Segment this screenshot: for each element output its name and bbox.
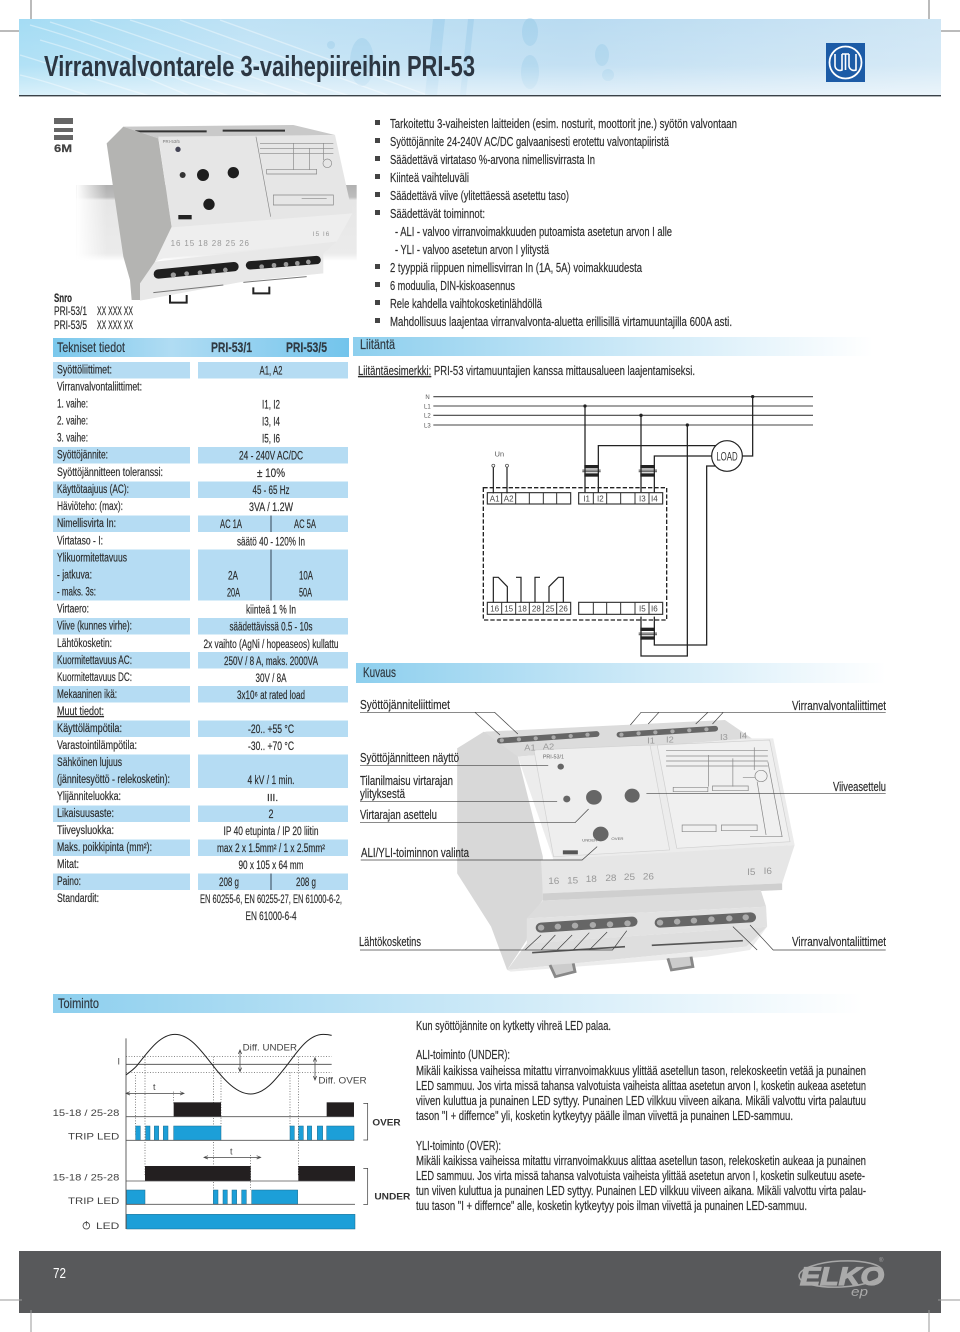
row: Virtaero: Virtaero:: [57, 604, 89, 616]
device illustration with callouts: 15: [567, 876, 578, 886]
feature bullet list: 6 moduulia, DIN-kiskoasennus: [390, 279, 515, 293]
feature bullet list: Rele kahdella vaihtokosketinlähdöllä: [390, 297, 542, 311]
icon: ELKO ep logo: [798, 1257, 885, 1299]
row: Virtataso: Virtataso - I:: [57, 536, 103, 548]
phase lines: L2: [424, 414, 431, 420]
row: 1. vaihe: [57, 398, 280, 412]
device illustration with callouts: I2: [666, 735, 674, 745]
row: Syöttöjännite: Syöttöjännite:: [57, 450, 108, 462]
wires: [585, 397, 753, 656]
row: Käyttötaajuus: 45 - 65 Hz: [252, 485, 290, 497]
feature bullet list: Tarkoitettu 3-vaiheisten laitteiden (esim. nosturit, moottorit jne.) syötön valvontaan: [390, 117, 737, 131]
heading: Liitäntä: [353, 336, 873, 356]
supply terminals Un: Un: [495, 450, 504, 459]
device illustration with callouts: A2: [543, 742, 554, 751]
device illustration with callouts: 16: [548, 876, 559, 887]
callout labels: Syöttöjänniteliittimet: [360, 698, 450, 712]
function description text: ALI-toiminto (UNDER):: [416, 1048, 510, 1062]
terminals top: I3: [639, 494, 646, 503]
row: Lähtökosketin: [57, 638, 338, 651]
row: Nimellisvirta: [53, 516, 348, 532]
row: 1. vaihe: I1, I2: [262, 400, 280, 412]
axis labels: Diff. UNDER: [243, 1043, 298, 1053]
table header: [53, 338, 349, 357]
row: Standardit: EN 61000-6-4: [246, 911, 297, 923]
device illustration with callouts: OVER: [611, 836, 624, 841]
row: Viive: Viive (kunnes virhe):: [57, 620, 132, 632]
phase lines: L3: [424, 423, 431, 429]
product photo: 16 15 18 28 25 26: [171, 239, 250, 248]
row: Varastointilämpötila: -30.. +70 °C: [248, 741, 294, 753]
feature bullet list: - ALI - valvoo virranvoimakkuuden putoamista asetetun arvon I alle: [395, 225, 672, 239]
row: Varastointilämpötila: Varastointilämpötila:: [57, 740, 137, 752]
header banner: [19, 18, 941, 96]
row: Paino: [53, 874, 348, 890]
page number: 72: [53, 1265, 66, 1282]
device illustration with callouts: 18: [586, 874, 597, 885]
row: Maks. poikkipinta: max 2 x 1.5mm² / 1 x 2.5mm²: [217, 843, 325, 855]
row: Kuormitettavuus AC: Kuormitettavuus AC:: [57, 655, 132, 667]
function description text: [416, 1019, 866, 1213]
row: Standardit: EN 60255-6, EN 60255-27, EN 61000-6-2,: [200, 894, 342, 906]
row: Sähköinen lujuus: (jännitesyöttö - relekosketin):: [57, 774, 170, 786]
row: Standardit: [57, 893, 342, 923]
terminals top: I1: [583, 494, 591, 503]
row: Ylikuormitettavuus: Ylikuormitettavuus: [57, 552, 127, 564]
terminals top: A2: [504, 494, 514, 503]
row: Varastointilämpötila: [57, 740, 294, 753]
power LED bar: [127, 1214, 355, 1229]
terminals bottom: 28: [532, 605, 541, 614]
axis labels: TRIP LED: [68, 1196, 120, 1206]
device illustration with callouts: I1: [647, 736, 655, 745]
heading: Toiminto: [53, 994, 863, 1013]
arrows and brackets: [126, 1050, 368, 1204]
row: Mekaaninen ikä: Mekaaninen ikä:: [57, 689, 117, 701]
product photo: PRI-53/5: [163, 139, 180, 144]
row: Standardit: Standardit:: [57, 893, 99, 905]
row: Ylijänniteluokka: III.: [267, 793, 278, 804]
feature bullet list: Mahdollisuus laajentaa virranvalvonta-aluetta erillisillä virtamuuntajilla 600A asti.: [390, 315, 732, 329]
row: Nimellisvirta: AC 5A: [294, 519, 316, 531]
terminals top: A1: [490, 494, 500, 503]
row: Mitat: 90 x 105 x 64 mm: [238, 860, 304, 872]
axis labels: 15-18 / 25-28: [53, 1108, 119, 1118]
row: 2. vaihe: [57, 416, 280, 428]
callout labels: Lähtökosketins: [359, 935, 421, 949]
connection example caption: Liitäntäesimerkki: PRI-53 virtamuuntajien kanssa mittausalueen laajentamiseksi.: [358, 364, 695, 378]
order numbers: [54, 293, 133, 332]
function description text: YLI-toiminto (OVER):: [416, 1139, 501, 1153]
feature bullet list: Kiinteä vaihteluväli: [390, 171, 469, 185]
row: Viive: [53, 618, 348, 634]
row: Virranvalvontaliittimet: Virranvalvontaliittimet:: [57, 382, 142, 394]
row: Käyttölämpötila: [53, 720, 348, 737]
row: Virtataso: säätö 40 - 120% In: [237, 536, 305, 548]
order numbers: XX XXX XX: [97, 306, 133, 318]
row: Syöttöjännite: 24 - 240V AC/DC: [239, 450, 303, 462]
callout labels: [359, 698, 886, 949]
callout labels: Tilanilmaisu virtarajan: [360, 774, 453, 788]
row: Kuormitettavuus DC: [57, 672, 287, 685]
feature bullet list: Säädettävä virtataso %-arvona nimellisvirrasta In: [390, 153, 595, 167]
axis labels: [53, 1043, 411, 1231]
callout labels: Virranvalvontaliittimet: [792, 935, 886, 949]
row: Tiiveysluokka: [57, 825, 318, 838]
axis labels: TRIP LED: [68, 1131, 120, 1141]
row: 1. vaihe: 1. vaihe:: [57, 398, 88, 410]
feature bullet list: Säädettävät toiminnot:: [390, 207, 485, 221]
terminals bottom: 16: [490, 605, 500, 614]
row: Paino: 208 g: [219, 877, 239, 889]
row: Häviöteho: 3VA / 1.2W: [249, 502, 293, 514]
row: Mekaaninen ikä: 3x10⁶ at rated load: [237, 690, 305, 702]
row: Mekaaninen ikä: [53, 686, 348, 702]
row: Käyttötaajuus: Käyttötaajuus (AC):: [57, 484, 129, 496]
function description text: tason "I + differnce" yli, kosketin kytkeytyy päälle ilman viivettä ja punainen LED-sammuu.: [416, 1109, 793, 1123]
row: Syöttöliittimet: Syöttöliittimet:: [57, 364, 112, 376]
row: Häviöteho: Häviöteho: (max):: [57, 501, 123, 513]
row: Lähtökosketin: 2x vaihto (AgNi / hopeaseos) kullattu: [204, 639, 338, 651]
row: Tiiveysluokka: IP 40 etupinta / IP 20 liitin: [224, 826, 318, 838]
relay module dashed outline: [483, 488, 667, 620]
current transformers: [582, 465, 657, 640]
row: Likaisuusaste: Likaisuusaste:: [57, 808, 114, 820]
device illustration with callouts: A1: [524, 743, 536, 753]
terminals top: I2: [597, 494, 604, 503]
table header: PRI-53/5: [286, 339, 327, 355]
trip LED UNDER: [126, 1190, 355, 1204]
icon: UTU logo: [826, 43, 865, 82]
row: 3. vaihe: I5, I6: [262, 434, 280, 446]
order numbers: PRI-53/1: [54, 306, 87, 318]
axis labels: t: [230, 1146, 233, 1156]
table header: Tekniset tiedot: [57, 339, 125, 355]
row: Virtataso: [57, 536, 305, 548]
terminals bottom: I5: [639, 605, 646, 614]
footer bar: [0, 1251, 960, 1332]
supply terminals Un: [492, 450, 508, 493]
row: toleranssi: ± 10%: [257, 468, 285, 480]
terminals top: I4: [651, 494, 658, 503]
row: toleranssi: [57, 467, 285, 480]
callout labels: ylityksestä: [360, 787, 405, 801]
row: Ylikuormitettavuus: [53, 550, 348, 600]
row: Ylikuormitettavuus: 50A: [299, 588, 312, 600]
device illustration with callouts: PRI-53/1: [543, 755, 564, 761]
table header: PRI-53/1: [211, 339, 252, 355]
row: Nimellisvirta: AC 1A: [220, 519, 242, 531]
row: Maks. poikkipinta: Maks. poikkipinta (mm²):: [57, 842, 152, 854]
row: 2. vaihe: I3, I4: [262, 416, 280, 428]
row: Paino: 208 g: [296, 877, 316, 889]
axis labels: 15-18 / 25-28: [53, 1173, 119, 1183]
row: 3. vaihe: 3. vaihe:: [57, 432, 88, 444]
row: Kuormitettavuus DC: Kuormitettavuus DC:: [57, 672, 132, 684]
row: Tiiveysluokka: Tiiveysluokka:: [57, 825, 114, 837]
row: Virtaero: kiinteä 1 % In: [246, 604, 296, 616]
row: Paino: Paino:: [57, 876, 81, 888]
title: Virranvalvontarele 3-vaihepiireihin PRI-53: [44, 51, 475, 83]
row: Ylikuormitettavuus: 10A: [299, 570, 313, 582]
row: Syöttöjännite: [53, 447, 348, 464]
timing diagram: [53, 1034, 411, 1231]
callout labels: ALI/YLI-toiminnon valinta: [361, 846, 469, 860]
relay contacts: [493, 577, 563, 602]
row: 3. vaihe: [57, 432, 280, 446]
product photo: [77, 125, 357, 303]
row: Häviöteho: [57, 501, 293, 514]
heading: Liitäntä: Liitäntä: [360, 336, 395, 352]
row: Ylijänniteluokka: Ylijänniteluokka:: [57, 791, 121, 803]
terminals bottom: 18: [518, 605, 527, 614]
feature bullet list: 2 tyyppiä riippuen nimellisvirran In (1A, 5A) voimakkuudesta: [390, 261, 642, 275]
row: Kuormitettavuus DC: 30V / 8A: [256, 673, 287, 685]
order numbers: PRI-53/5: [54, 320, 87, 332]
feature bullet list: - YLI - valvoo asetetun arvon I ylitystä: [395, 243, 549, 257]
row: toleranssi: Syöttöjännitteen toleranssi:: [57, 467, 163, 479]
axes and levels: [126, 1038, 332, 1229]
row: Sähköinen lujuus: Sähköinen lujuus: [57, 757, 122, 769]
device illustration with callouts: I6: [764, 866, 772, 877]
function description text: Kun syöttöjännite on kytketty vihreä LED palaa.: [416, 1019, 611, 1033]
row: Likaisuusaste: 2: [268, 809, 274, 821]
feature bullet list: Syöttöjännite 24-240V AC/DC galvaanisesti erotettu valvontapiiristä: [390, 135, 669, 149]
callout labels: Virtarajan asettelu: [360, 808, 437, 822]
row: Syöttöliittimet: [53, 362, 348, 378]
row: Sähköinen lujuus: 4 kV / 1 min.: [248, 775, 294, 787]
device illustration with callouts: 26: [643, 872, 654, 882]
row: Ylikuormitettavuus: 2A: [228, 570, 238, 582]
terminals top: [487, 493, 663, 504]
row: Kuormitettavuus AC: [53, 652, 348, 668]
callout labels: Viiveasettelu: [833, 780, 886, 794]
terminals bottom: 25: [546, 605, 555, 614]
row: Mitat: [57, 859, 304, 872]
icon: LOAD: LOAD: [716, 449, 738, 463]
row: 2. vaihe: 2. vaihe:: [57, 416, 88, 428]
row: Ylijänniteluokka: [57, 791, 278, 804]
terminals bottom: I6: [651, 605, 658, 614]
wiring diagram: [424, 394, 813, 657]
phase lines: [424, 395, 813, 429]
row: Virtaero: [57, 604, 296, 616]
row: Käyttölämpötila: -20.. +55 °C: [248, 724, 294, 736]
callout lines: [360, 712, 886, 950]
terminals bottom: [487, 602, 663, 614]
heading: Kuvaus: [356, 663, 886, 683]
heading: Toiminto: Toiminto: [58, 995, 99, 1011]
row: Syöttöliittimet: A1, A2: [260, 366, 282, 378]
phase lines: N: [425, 395, 430, 401]
row: Ylikuormitettavuus: - maks. 3s:: [57, 586, 96, 598]
relay state UNDER: [126, 1166, 355, 1181]
icon: 6M module size: 6M: [54, 143, 72, 155]
axis labels: I: [117, 1056, 120, 1066]
row: Nimellisvirta: Nimellisvirta In:: [57, 518, 116, 530]
row: Käyttölämpötila: Käyttölämpötila:: [57, 723, 122, 735]
relay state OVER: [126, 1102, 354, 1117]
row: Sähköinen lujuus: [53, 754, 348, 788]
device illustration with callouts: UNDER: [582, 837, 597, 842]
row: Lähtökosketin: Lähtökosketin:: [57, 638, 112, 650]
device illustration with callouts: [360, 712, 886, 977]
device illustration with callouts: 25: [624, 872, 635, 883]
icon: ELKO ep logo: ep: [851, 1284, 868, 1299]
icon: ELKO ep logo: ®: [879, 1257, 884, 1264]
device illustration with callouts: 28: [605, 873, 616, 884]
icon: 6M module size: [54, 118, 73, 155]
row: Mitat: Mitat:: [57, 859, 79, 871]
function description text: tuu tason "I + differnce" alle, kosketin kytkeytyy pois ilman viivettä ja punainen LED-sammuu.: [416, 1199, 807, 1213]
axis labels: Diff. OVER: [318, 1075, 367, 1085]
device illustration with callouts: I5: [747, 867, 755, 878]
axis labels: LED: [96, 1221, 120, 1231]
terminals bottom: 15: [504, 605, 514, 614]
axis labels: t: [153, 1082, 156, 1092]
order numbers: XX XXX XX: [97, 320, 133, 332]
row: Ylikuormitettavuus: 20A: [227, 588, 240, 600]
axis labels: UNDER: [374, 1191, 411, 1201]
axis labels: OVER: [372, 1117, 401, 1127]
order numbers: Snro: [54, 293, 72, 305]
icon: ELKO ep logo: ELKO: [800, 1263, 885, 1291]
row: Ylikuormitettavuus: - jatkuva:: [57, 570, 92, 582]
product photo: I5 I6: [313, 231, 330, 238]
feature bullet list: Säädettävä viive (ylitettäessä asetettu taso): [390, 189, 569, 203]
current sine wave: [126, 1034, 332, 1094]
phase lines: L1: [424, 404, 431, 410]
row: Käyttötaajuus: [53, 482, 348, 498]
row: Viive: säädettävissä 0.5 - 10s: [230, 622, 313, 634]
trip LED OVER: [126, 1126, 354, 1140]
icon: LOAD: [712, 441, 742, 471]
panel: technical data table: [53, 338, 349, 923]
callout labels: Virranvalvontaliittimet: [792, 699, 886, 713]
callout labels: Syöttöjännitteen näyttö: [360, 751, 459, 765]
feature bullet list: [375, 117, 737, 329]
terminals bottom: 26: [559, 605, 568, 614]
row: Kuormitettavuus AC: 250V / 8 A, maks. 2000VA: [224, 656, 318, 668]
row: Likaisuusaste: [53, 806, 348, 822]
row: Muut tiedot: Muut tiedot:: [57, 706, 104, 718]
row: Maks. poikkipinta: [53, 840, 348, 856]
device illustration with callouts: I4: [739, 731, 747, 741]
device illustration with callouts: I3: [720, 732, 728, 742]
heading: Kuvaus: Kuvaus: [363, 664, 396, 680]
